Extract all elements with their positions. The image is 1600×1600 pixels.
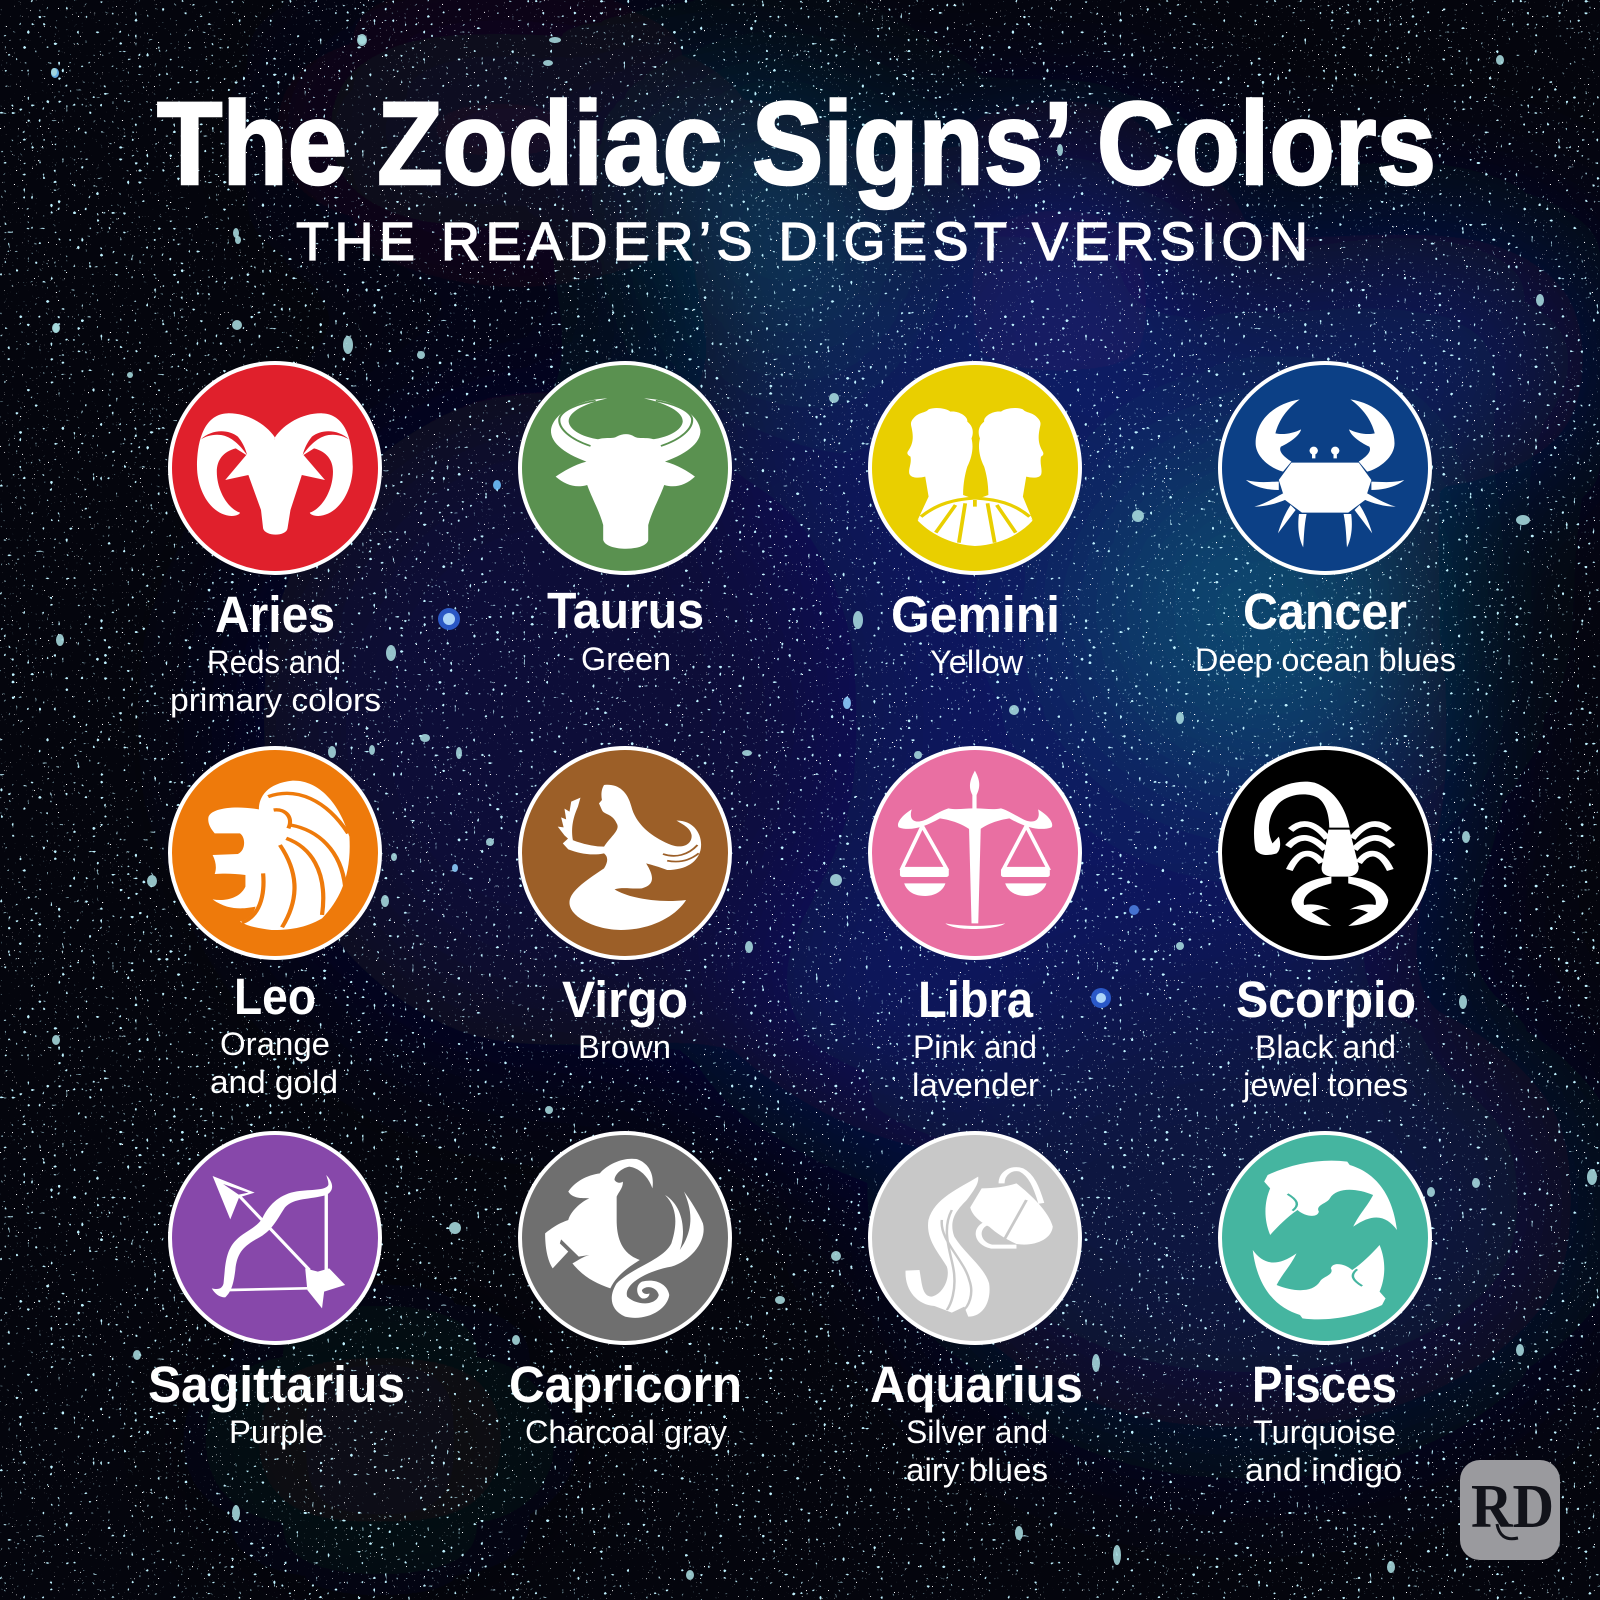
color description: Brown xyxy=(578,1029,671,1065)
name: Gemini xyxy=(891,586,1060,643)
panel: Capricorn xyxy=(509,1133,742,1450)
logo: RD badge xyxy=(1460,1460,1560,1560)
icon: ram xyxy=(170,363,380,573)
color description: Green xyxy=(581,641,671,677)
panel: Leo xyxy=(170,748,380,1100)
subtitle: THE READER’S DIGEST VERSION xyxy=(296,212,1308,272)
panel: Aries xyxy=(170,363,381,718)
color description: Yellow xyxy=(930,644,1024,680)
icon: crab xyxy=(1220,363,1430,573)
name: Scorpio xyxy=(1236,971,1416,1028)
panel: Cancer xyxy=(1195,363,1456,678)
icon: bow and arrow xyxy=(170,1133,380,1343)
name: Sagittarius xyxy=(148,1356,405,1413)
panel: Libra xyxy=(870,748,1080,1103)
color description: Turquoise xyxy=(1253,1414,1396,1450)
name: Capricorn xyxy=(509,1356,742,1413)
color description xyxy=(912,1029,1039,1103)
color description xyxy=(170,644,381,718)
color description: airy blues xyxy=(906,1452,1048,1488)
name: Aries xyxy=(215,586,335,643)
color description: and gold xyxy=(210,1064,338,1100)
icon: bull xyxy=(520,363,730,573)
color description: Black and xyxy=(1255,1029,1396,1065)
icon: two fish xyxy=(1220,1133,1430,1343)
color description: Orange xyxy=(220,1026,330,1062)
panel: Scorpio xyxy=(1220,748,1430,1103)
panel: Virgo xyxy=(520,748,730,1065)
color description xyxy=(1242,1029,1408,1103)
icon: lion xyxy=(170,748,380,958)
icon: scorpion xyxy=(1220,748,1430,958)
color description: jewel tones xyxy=(1242,1067,1408,1103)
icon: water bearer jug xyxy=(870,1133,1080,1343)
name: Pisces xyxy=(1252,1356,1397,1413)
icon: scales xyxy=(870,748,1080,958)
color description: primary colors xyxy=(170,682,381,718)
icon: maiden xyxy=(520,748,730,958)
color description: Reds and xyxy=(207,644,341,680)
icon: twins xyxy=(870,363,1080,573)
panel: Taurus xyxy=(520,363,730,677)
color description: Charcoal gray xyxy=(525,1414,727,1450)
color description: Deep ocean blues xyxy=(1195,642,1456,678)
color description: Purple xyxy=(229,1414,324,1450)
name: Virgo xyxy=(562,971,688,1028)
panel: Aquarius xyxy=(870,1133,1083,1488)
logo: RD badge: RD xyxy=(1471,1473,1554,1541)
title: The Zodiac Signs’ Colors xyxy=(157,78,1436,210)
name: Aquarius xyxy=(870,1356,1083,1413)
panel: Gemini xyxy=(870,363,1080,680)
panel: Pisces xyxy=(1220,1133,1430,1488)
color description xyxy=(210,1026,338,1100)
name: Cancer xyxy=(1243,583,1407,640)
name: Taurus xyxy=(547,582,704,639)
icon: sea goat xyxy=(520,1133,730,1343)
name: Libra xyxy=(918,971,1034,1028)
color description: lavender xyxy=(912,1067,1039,1103)
panel: Sagittarius xyxy=(148,1133,405,1450)
color description xyxy=(1245,1414,1402,1488)
color description: and indigo xyxy=(1245,1452,1402,1488)
color description: Silver and xyxy=(906,1414,1048,1450)
color description: Pink and xyxy=(913,1029,1037,1065)
name: Leo xyxy=(234,968,316,1025)
color description xyxy=(906,1414,1048,1488)
